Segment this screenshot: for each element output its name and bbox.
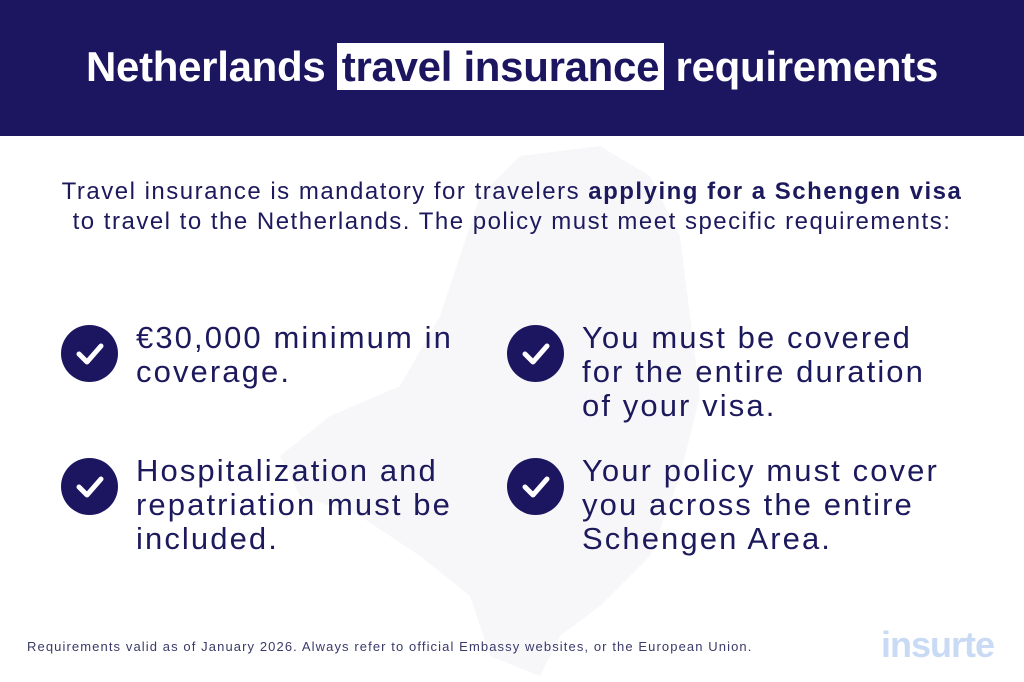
intro text <box>62 178 962 235</box>
item: coverage: €30,000 minimum in <box>136 320 453 355</box>
item: hospitalization: included. <box>136 521 279 556</box>
icon: check <box>507 325 564 382</box>
header band <box>0 0 1024 136</box>
item: duration: You must be covered <box>582 320 912 355</box>
title: Netherlands travel insurance requirements <box>86 43 938 90</box>
item: coverage: coverage. <box>136 354 291 389</box>
footer note: Requirements valid as of January 2026. Always refer to official Embassy websites, or the European Union. <box>27 639 752 654</box>
item: duration: of your visa. <box>582 388 776 423</box>
item: schengen area <box>507 453 939 556</box>
item: duration: for the entire duration <box>582 354 925 389</box>
item: schengen area: Your policy must cover <box>582 453 939 488</box>
intro text: to travel to the Netherlands. The policy must meet specific requirements: <box>73 208 951 235</box>
item: schengen area: you across the entire <box>582 487 914 522</box>
item: hospitalization: Hospitalization and <box>136 453 438 488</box>
icon: check <box>61 325 118 382</box>
item: hospitalization <box>61 453 452 556</box>
intro text: Travel insurance is mandatory for travelers applying for a Schengen visa <box>62 178 962 205</box>
item: duration <box>507 320 925 423</box>
logo: insurte <box>881 624 994 665</box>
item: coverage <box>61 320 453 389</box>
icon: check <box>507 458 564 515</box>
item: hospitalization: repatriation must be <box>136 487 452 522</box>
item: schengen area: Schengen Area. <box>582 521 832 556</box>
icon: check <box>61 458 118 515</box>
